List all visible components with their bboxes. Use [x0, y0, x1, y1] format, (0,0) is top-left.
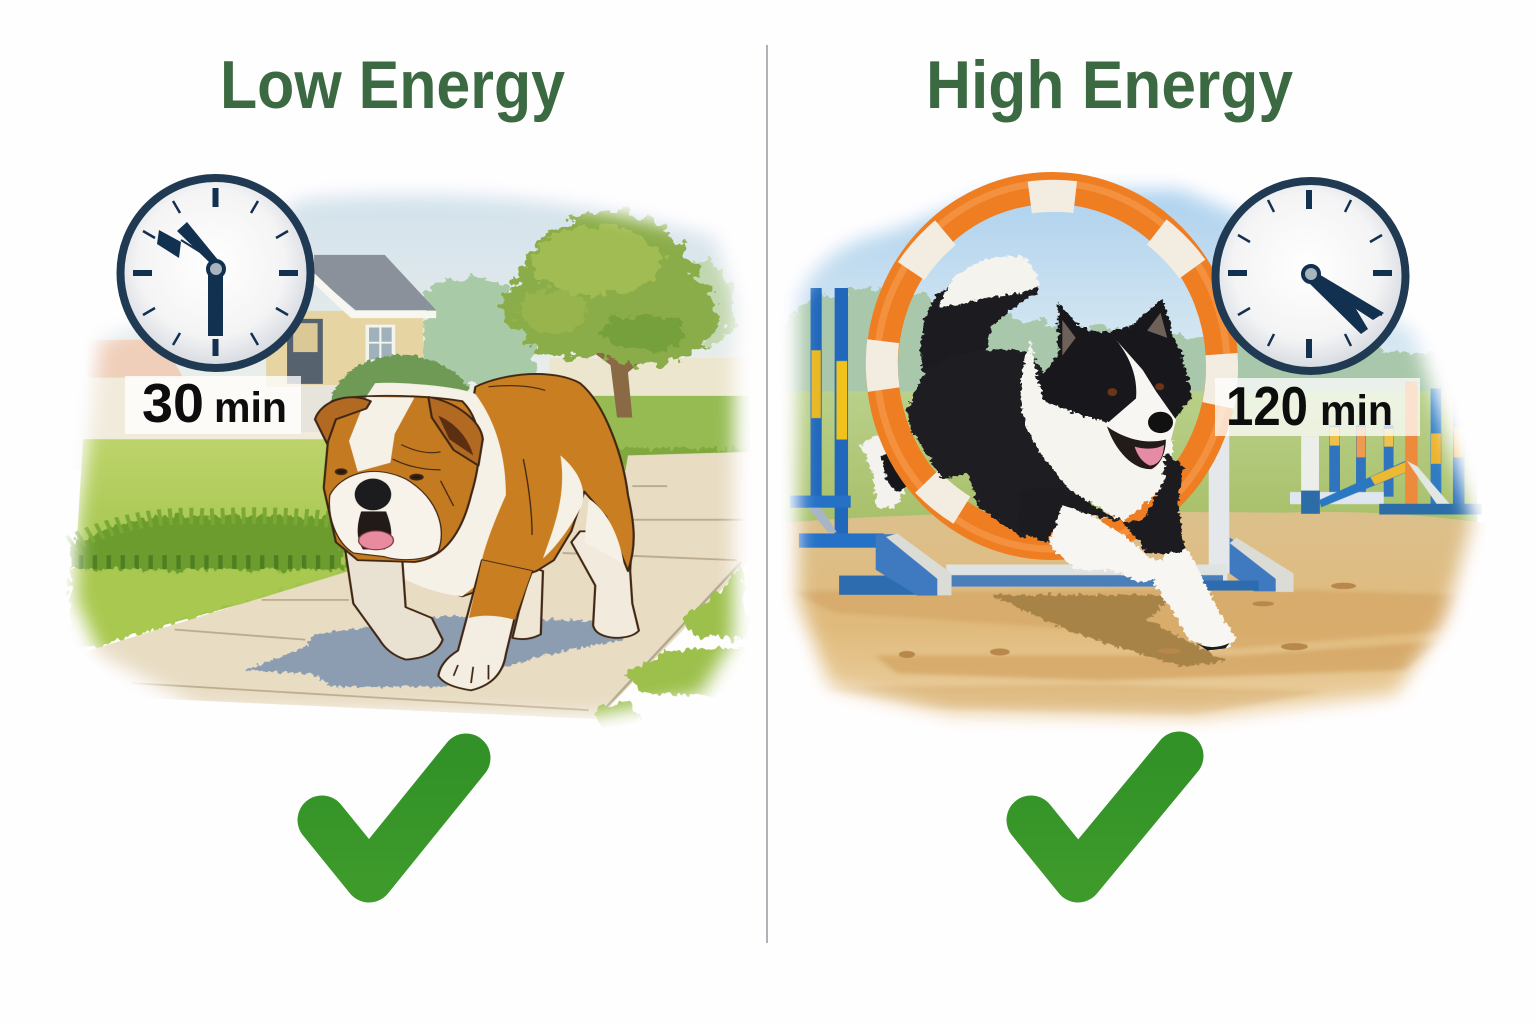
- panel: high energy agility scene: [780, 170, 1500, 741]
- lower grass strip: [70, 571, 340, 649]
- sidewalk: [83, 452, 750, 719]
- head: [1038, 299, 1192, 469]
- shoulder: [1018, 487, 1123, 543]
- jump stand base: [839, 533, 1294, 596]
- icon: left check mark: [322, 758, 466, 878]
- mouth: [1107, 426, 1166, 469]
- body: [457, 373, 635, 598]
- hind leg: [571, 531, 639, 638]
- tree: [501, 210, 737, 417]
- house: [266, 255, 436, 432]
- raised front leg: [345, 546, 443, 660]
- nose: [1148, 412, 1173, 433]
- bulldog shadow: [244, 616, 624, 687]
- icon: right check mark: [1031, 756, 1179, 878]
- ears: [315, 397, 371, 444]
- title: High Energy: High Energy: [926, 47, 1293, 123]
- dog shadow on ground: [991, 595, 1225, 667]
- distant houses: [87, 340, 750, 439]
- far chest side: [1143, 452, 1192, 561]
- jump stand post: [1209, 398, 1229, 573]
- flank patch: [543, 455, 583, 558]
- tail: [921, 262, 1038, 375]
- dirt shading: [790, 588, 1460, 716]
- far lawn: [584, 396, 750, 470]
- white chest: [1021, 341, 1174, 522]
- clock: 120 minutes: [1216, 181, 1406, 371]
- bush: [332, 354, 469, 401]
- front leg extended: [1154, 550, 1236, 651]
- far front leg: [512, 567, 543, 639]
- agility hoop: [807, 122, 1297, 610]
- center divider: [766, 45, 768, 943]
- blaze: [349, 397, 414, 472]
- distant treeline: [788, 286, 1444, 392]
- right agility equipment: [1290, 381, 1482, 515]
- clock ticks: [1228, 190, 1392, 358]
- head: [324, 396, 479, 562]
- dirt ground: [781, 512, 1486, 741]
- collie rear leg behind hoop: [861, 434, 924, 507]
- mouth: [358, 511, 391, 549]
- eyes: [336, 469, 346, 474]
- panel: low energy park scene: [40, 170, 760, 726]
- bulldog: [315, 374, 639, 690]
- duration label: 120 min: 120: [1226, 375, 1308, 437]
- duration label: 30 min: min: [214, 384, 287, 432]
- tail tip: [940, 256, 1041, 307]
- front leg raised: [1049, 506, 1165, 582]
- ear inner: [1062, 320, 1076, 356]
- border collie: [907, 256, 1236, 651]
- duration label: 120 min: [1215, 375, 1420, 437]
- duration label: 120 min: min: [1320, 387, 1393, 435]
- front lawn: [70, 439, 349, 651]
- clock hands: [157, 222, 223, 336]
- tongue: [359, 531, 393, 550]
- muzzle: [329, 471, 441, 560]
- right verge grass tufts: [593, 564, 750, 726]
- duration label: 30 min: [125, 372, 301, 434]
- body: [907, 349, 1111, 538]
- planted front leg: [438, 560, 532, 690]
- blurred background trees: [423, 276, 536, 387]
- field: [781, 391, 1477, 531]
- wrinkles: [393, 386, 545, 535]
- tongue: [1135, 445, 1164, 466]
- title: Low Energy: Low Energy: [220, 47, 565, 123]
- scene backdrop: [86, 187, 740, 439]
- duration label: 30 min: 30: [142, 372, 204, 434]
- sky: [790, 178, 1428, 355]
- clock hand: [1308, 273, 1384, 334]
- white chest and neck: [367, 382, 506, 597]
- blaze and muzzle: [1109, 340, 1176, 454]
- eyes: [1107, 388, 1117, 396]
- dirt pebbles: [899, 583, 1356, 658]
- nose: [355, 479, 391, 510]
- left weave poles: [790, 288, 884, 548]
- hedge of tall grass: [70, 516, 345, 569]
- clock ticks: [133, 188, 298, 356]
- clock: 30 minutes: [120, 178, 310, 368]
